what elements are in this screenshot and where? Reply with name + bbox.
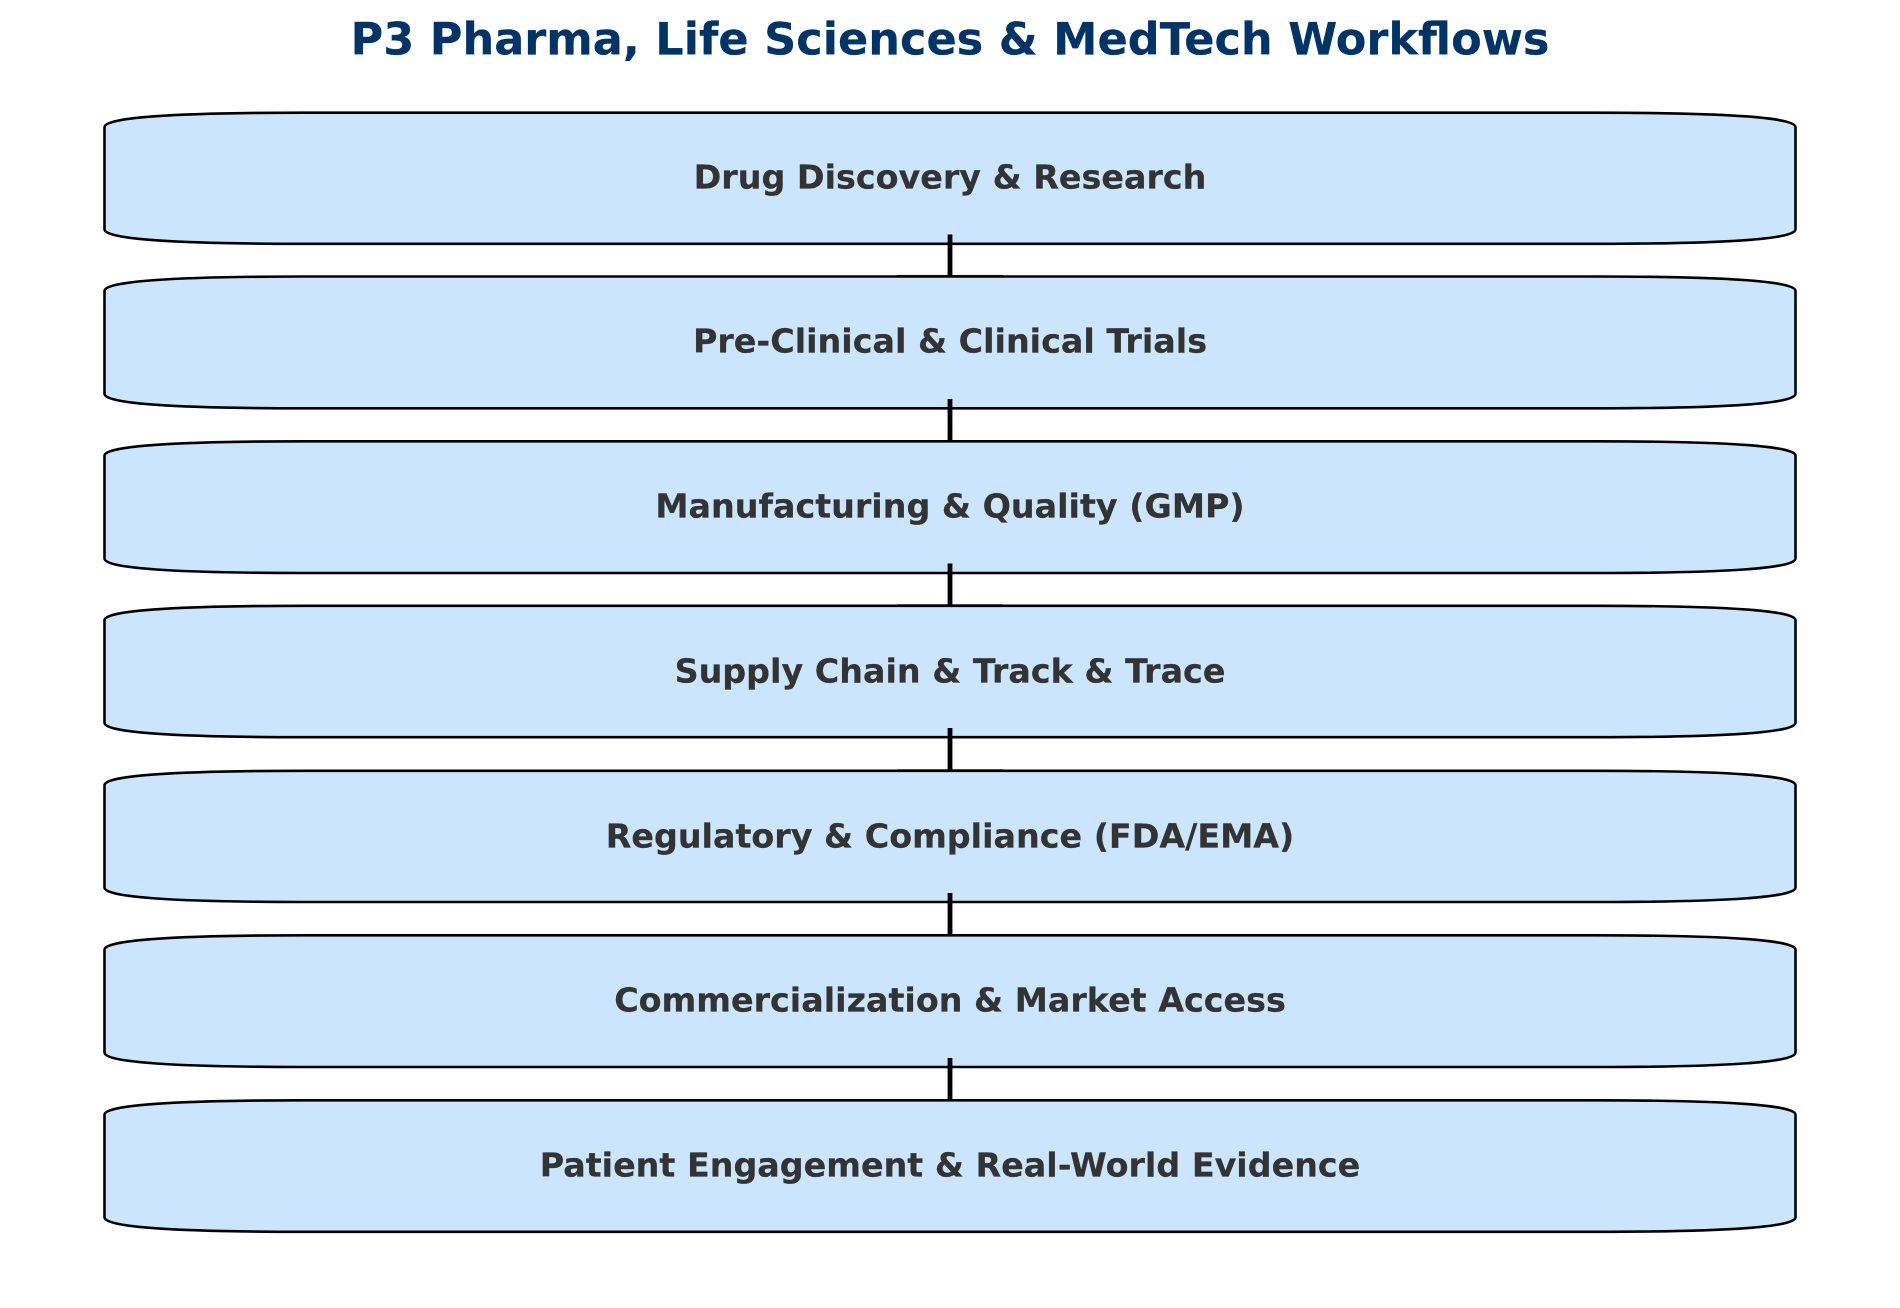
title: P3 Pharma, Life Sciences & MedTech Workflows (351, 14, 1549, 66)
step 7: Patient Engagement & Real-World Evidence: Patient Engagement & Real-World Evidence (540, 1146, 1360, 1184)
step 7: Patient Engagement & Real-World Evidence (104, 1100, 1796, 1232)
arrow: step 4 to step 5 (897, 728, 1003, 770)
step 3: Manufacturing & Quality (GMP) (104, 441, 1796, 573)
step 5: Regulatory & Compliance (FDA/EMA): Regulatory & Compliance (FDA/EMA) (606, 816, 1294, 856)
step 6: Commercialization & Market Access (104, 935, 1796, 1067)
step 1: Drug Discovery & Research (104, 113, 1796, 244)
arrow: step 1 to step 2 (897, 234, 1003, 276)
step 6: Commercialization & Market Access: Commercialization & Market Access (614, 980, 1286, 1020)
step 5: Regulatory & Compliance (FDA/EMA) (104, 771, 1796, 902)
step 3: Manufacturing & Quality (GMP): Manufacturing & Quality (GMP) (655, 486, 1245, 526)
step 1: Drug Discovery & Research: Drug Discovery & Research (694, 158, 1206, 196)
arrow: step 3 to step 4 (897, 564, 1003, 606)
step 2: Pre-Clinical & Clinical Trials: Pre-Clinical & Clinical Trials (693, 322, 1207, 360)
arrow: step 6 to step 7 (948, 1058, 952, 1100)
step 2: Pre-Clinical & Clinical Trials (104, 276, 1796, 408)
step 4: Supply Chain & Track & Trace (104, 606, 1796, 737)
arrow: step 2 to step 3 (948, 399, 952, 441)
arrow: step 5 to step 6 (948, 893, 952, 935)
step 4: Supply Chain & Track & Trace: Supply Chain & Track & Trace (675, 652, 1225, 690)
